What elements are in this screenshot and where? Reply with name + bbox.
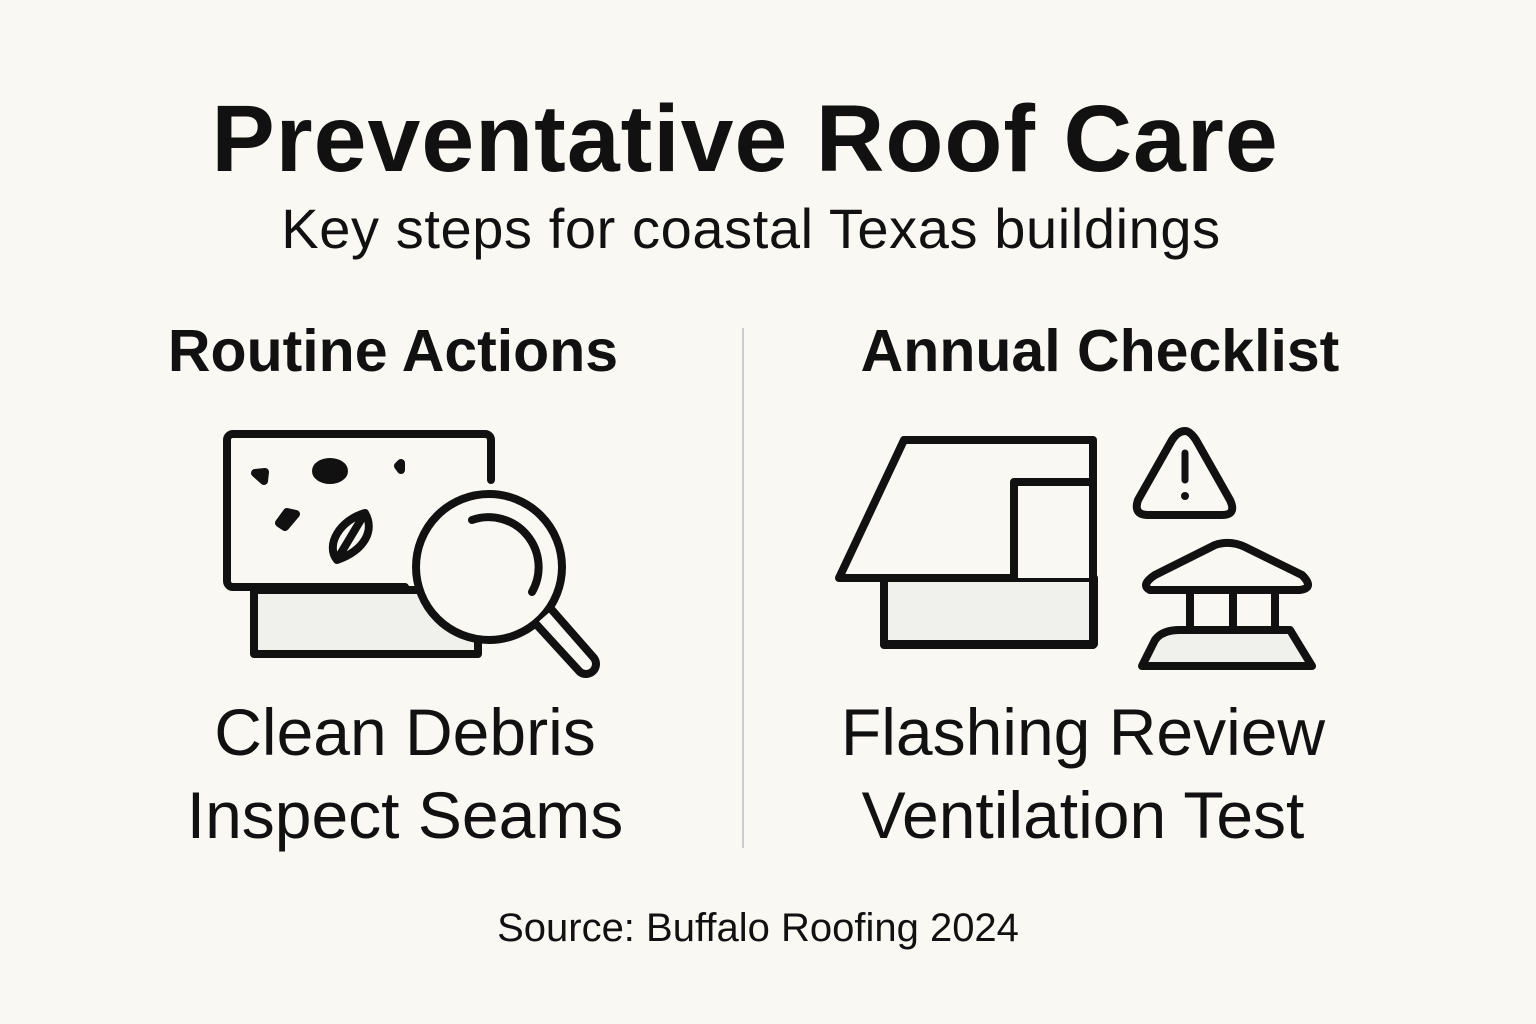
heading: routine actions: Routine Actions (168, 318, 618, 384)
label: routine items: Inspect Seams (187, 778, 623, 852)
heading: annual checklist: Annual Checklist (861, 318, 1339, 384)
divider (742, 328, 744, 848)
label: annual items: Flashing Review (841, 695, 1325, 769)
subtitle: Key steps for coastal Texas buildings (281, 197, 1221, 260)
source: Source: Buffalo Roofing 2024 (497, 906, 1019, 950)
label: annual items: Ventilation Test (862, 778, 1304, 852)
title: Preventative Roof Care (211, 86, 1279, 192)
label: annual items (841, 695, 1326, 852)
label: routine items: Clean Debris (214, 695, 596, 769)
label: routine items (187, 695, 623, 852)
